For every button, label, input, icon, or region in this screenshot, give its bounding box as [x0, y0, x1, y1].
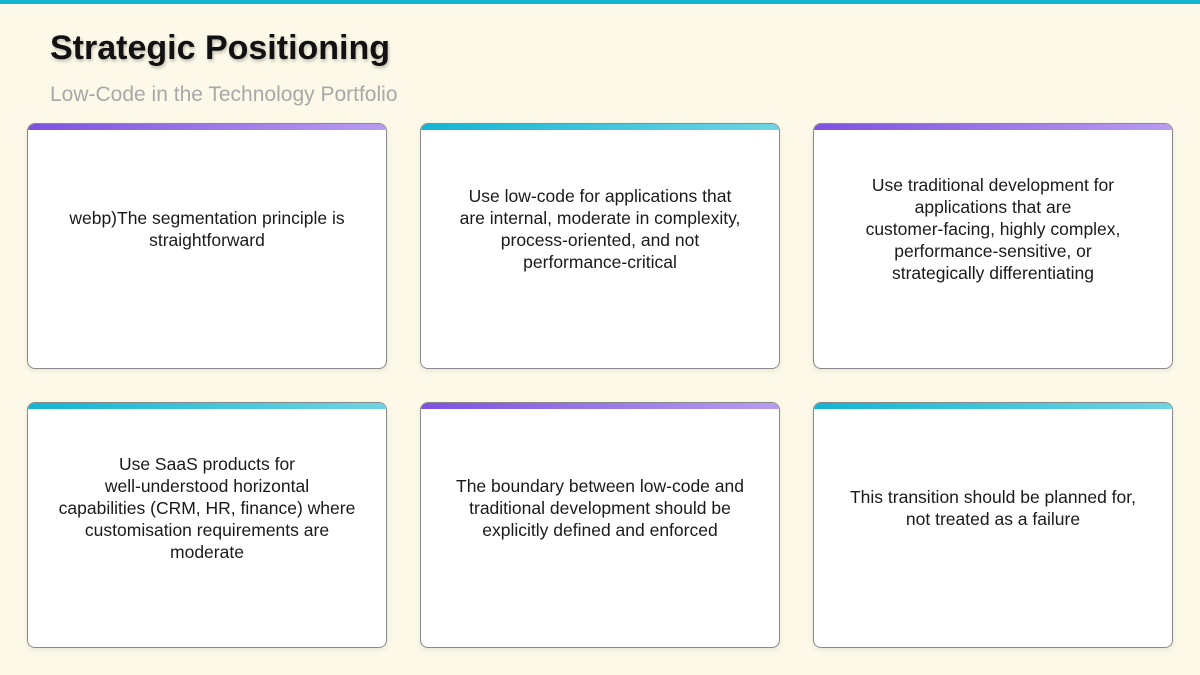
panel: low-code use — [420, 123, 780, 369]
panel: traditional development: applications that are — [915, 197, 1071, 217]
panel: segmentation principle: webp)The segmentation principle is — [69, 208, 345, 228]
panel: SaaS: Use SaaS products for — [119, 454, 295, 474]
panel: SaaS: well-understood horizontal — [105, 476, 309, 496]
panel: SaaS: moderate — [170, 542, 244, 562]
title: Strategic Positioning — [50, 29, 390, 67]
panel: low-code use: are internal, moderate in complexity, — [460, 208, 740, 228]
panel: traditional development: performance-sensitive, or — [894, 241, 1092, 261]
panel: traditional development: customer-facing, highly complex, — [866, 219, 1120, 239]
subtitle: Low-Code in the Technology Portfolio — [50, 83, 398, 106]
panel: low-code use: process-oriented, and not — [501, 230, 699, 250]
panel: boundary — [420, 402, 780, 648]
panel: boundary: The boundary between low-code and — [456, 476, 744, 496]
panel: traditional development: strategically differentiating — [892, 263, 1094, 283]
panel: boundary: explicitly defined and enforced — [482, 520, 718, 540]
panel: SaaS: customisation requirements are — [85, 520, 329, 540]
panel: transition: This transition should be planned for, — [850, 487, 1136, 507]
panel: transition: not treated as a failure — [906, 509, 1080, 529]
panel: traditional development: Use traditional development for — [872, 175, 1114, 195]
panel: segmentation principle: straightforward — [149, 230, 265, 250]
panel: boundary: traditional development should be — [469, 498, 731, 518]
panel: low-code use: performance-critical — [523, 252, 677, 272]
panel: segmentation principle — [27, 123, 387, 369]
panel: low-code use: Use low-code for applications that — [469, 186, 731, 206]
panel: traditional development — [813, 123, 1173, 369]
panel: SaaS — [27, 402, 387, 648]
panel: SaaS: capabilities (CRM, HR, finance) where — [59, 498, 355, 518]
panel: transition — [813, 402, 1173, 648]
